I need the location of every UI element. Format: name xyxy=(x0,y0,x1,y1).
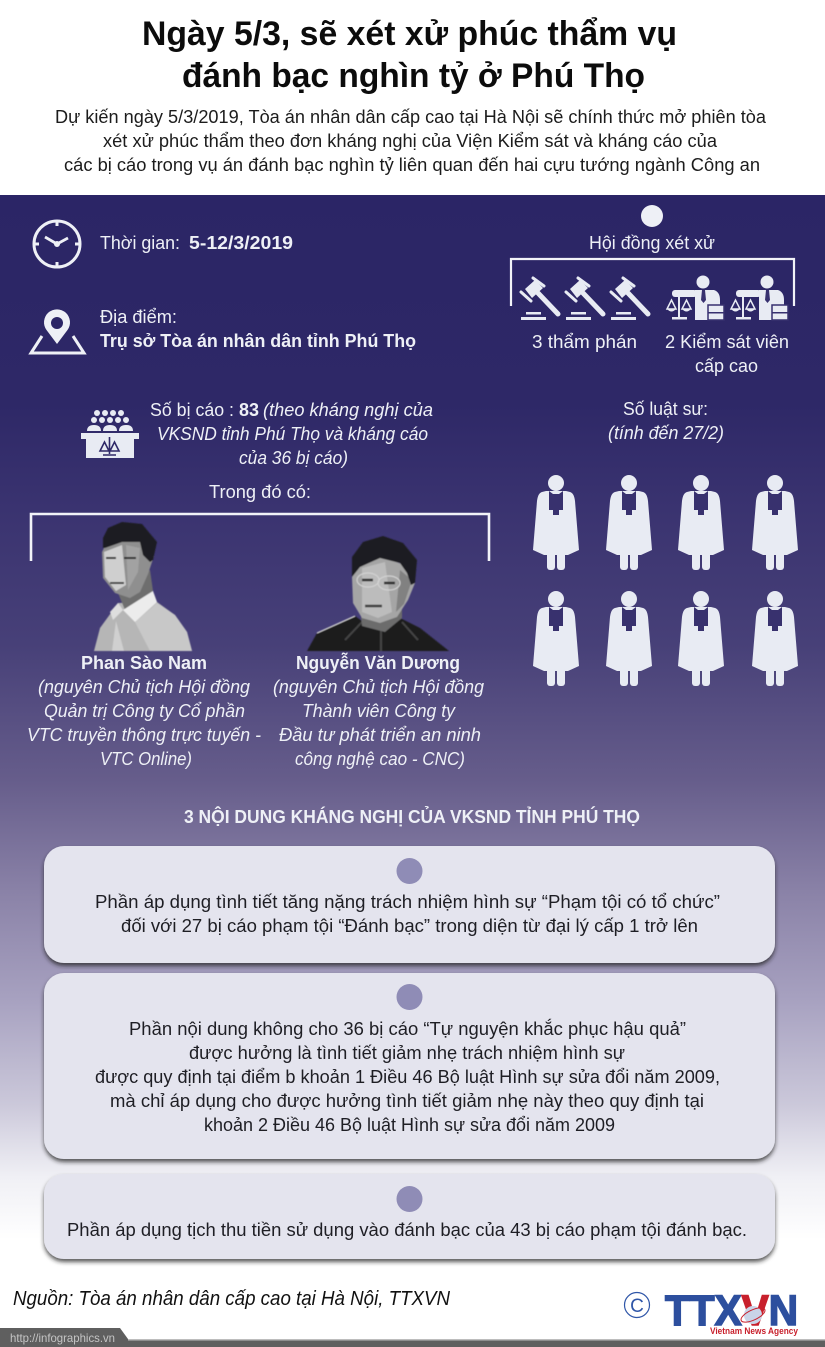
icons: three gavels xyxy=(521,278,648,320)
logo: TTXVN: Vietnam News Agency xyxy=(710,1326,799,1337)
person: Nguyễn Văn Dương text: (nguyên Chủ tịch Hội đồng xyxy=(273,677,484,697)
card 1: Phần áp dụng tình tiết tăng nặng trách nhiệm hình sự “Phạm tội có tổ chức” xyxy=(95,892,720,912)
icons: two prosecutors xyxy=(667,276,788,320)
footer bar xyxy=(0,1328,825,1347)
footer bar: http://infographics.vn xyxy=(10,1331,115,1345)
location text: Trụ sở Tòa án nhân dân tỉnh Phú Thọ xyxy=(100,331,416,351)
bracket: trial panel xyxy=(511,259,794,306)
lawyers heading: (tính đến 27/2) xyxy=(608,423,724,443)
defendants text xyxy=(150,400,433,468)
intro text: Dự kiến ngày 5/3/2019, Tòa án nhân dân cấp cao tại Hà Nội sẽ chính thức mở phiên tòa xyxy=(55,107,767,127)
trial panel marker dot xyxy=(641,205,663,227)
card 2: Phần nội dung không cho 36 bị cáo “Tự nguyện khắc phục hậu quả” xyxy=(129,1018,686,1039)
lawyers heading xyxy=(608,399,724,443)
card 2: được hưởng là tình tiết giảm nhẹ trách nhiệm hình sự xyxy=(189,1043,625,1063)
person: Phan Sào Nam text xyxy=(27,653,261,769)
time text: 5-12/3/2019 xyxy=(189,233,293,253)
time text xyxy=(100,233,293,253)
card 2 xyxy=(44,973,775,1159)
bracket: defendants xyxy=(31,514,489,561)
icon: map pin xyxy=(31,309,84,353)
location text xyxy=(100,307,416,351)
lawyers heading: Số luật sư: xyxy=(623,399,708,419)
subheading: among them: Trong đó có: xyxy=(209,482,311,502)
icon: clock xyxy=(34,221,80,267)
logo: TTXVN: TTXVN xyxy=(665,1287,798,1335)
source: Nguồn: Tòa án nhân dân cấp cao tại Hà Nội, TTXVN xyxy=(13,1288,451,1310)
person: Phan Sào Nam text: VTC truyền thông trực tuyến - xyxy=(27,725,261,745)
title xyxy=(142,15,677,95)
card 3: Phần áp dụng tịch thu tiền sử dụng vào đánh bạc của 43 bị cáo phạm tội đánh bạc. xyxy=(67,1220,747,1240)
person: Nguyễn Văn Dương text: Nguyễn Văn Dương xyxy=(296,652,460,673)
label: judges: 3 thẩm phán xyxy=(532,332,637,352)
time text: Thời gian: xyxy=(100,233,180,253)
title: Ngày 5/3, sẽ xét xử phúc thẩm vụ xyxy=(142,15,677,53)
person: Nguyễn Văn Dương text: Đầu tư phát triển an ninh xyxy=(279,725,481,745)
person: Phan Sào Nam text: (nguyên Chủ tịch Hội đồng xyxy=(38,677,250,697)
person: Nguyễn Văn Dương text xyxy=(273,652,484,769)
defendants text: Số bị cáo : xyxy=(150,400,234,420)
photo: Phan Sào Nam xyxy=(94,522,192,651)
intro text: xét xử phúc thẩm theo đơn kháng nghị của Viện Kiểm sát và kháng cáo của xyxy=(103,131,718,151)
defendants text: VKSND tỉnh Phú Thọ và kháng cáo xyxy=(157,424,428,444)
person: Phan Sào Nam text: VTC Online) xyxy=(100,749,192,769)
person: Phan Sào Nam text: Phan Sào Nam xyxy=(81,653,207,673)
card 1: đối với 27 bị cáo phạm tội “Đánh bạc” trong diện từ đại lý cấp 1 trở lên xyxy=(121,916,698,936)
intro text: các bị cáo trong vụ án đánh bạc nghìn tỷ liên quan đến hai cựu tướng ngành Công an xyxy=(64,155,760,175)
card 3 xyxy=(44,1174,775,1259)
label: prosecutors xyxy=(665,332,789,376)
location text: Địa điểm: xyxy=(100,307,177,327)
defendants text: (theo kháng nghị của xyxy=(263,400,433,420)
icon: defendants xyxy=(81,410,139,458)
label: prosecutors: 2 Kiểm sát viên xyxy=(665,332,789,352)
defendants text: của 36 bị cáo) xyxy=(239,448,348,468)
card 2: mà chỉ áp dụng cho được hưởng tình tiết giảm nhẹ này theo quy định tại xyxy=(110,1091,704,1111)
icons: eight lawyers xyxy=(533,475,798,686)
trial panel heading: Hội đồng xét xử xyxy=(589,233,715,253)
label: prosecutors: cấp cao xyxy=(695,356,758,376)
logo: TTXVN: C xyxy=(630,1296,644,1317)
photo: Nguyễn Văn Dương xyxy=(307,536,449,651)
section heading: 3 NỘI DUNG KHÁNG NGHỊ CỦA VKSND TỈNH PHÚ THỌ xyxy=(184,806,640,827)
card 2: được quy định tại điểm b khoản 1 Điều 46 Bộ luật Hình sự sửa đổi năm 2009, xyxy=(95,1067,720,1087)
defendants text: 83 xyxy=(239,400,259,420)
title: đánh bạc nghìn tỷ ở Phú Thọ xyxy=(182,57,645,95)
person: Nguyễn Văn Dương text: công nghệ cao - CNC) xyxy=(295,749,465,769)
person: Nguyễn Văn Dương text: Thành viên Công ty xyxy=(302,701,456,721)
card 2: khoản 2 Điều 46 Bộ luật Hình sự sửa đổi năm 2009 xyxy=(204,1115,615,1135)
intro text xyxy=(55,107,767,175)
person: Phan Sào Nam text: Quản trị Công ty Cổ phần xyxy=(44,701,245,721)
card 1 xyxy=(44,846,775,963)
